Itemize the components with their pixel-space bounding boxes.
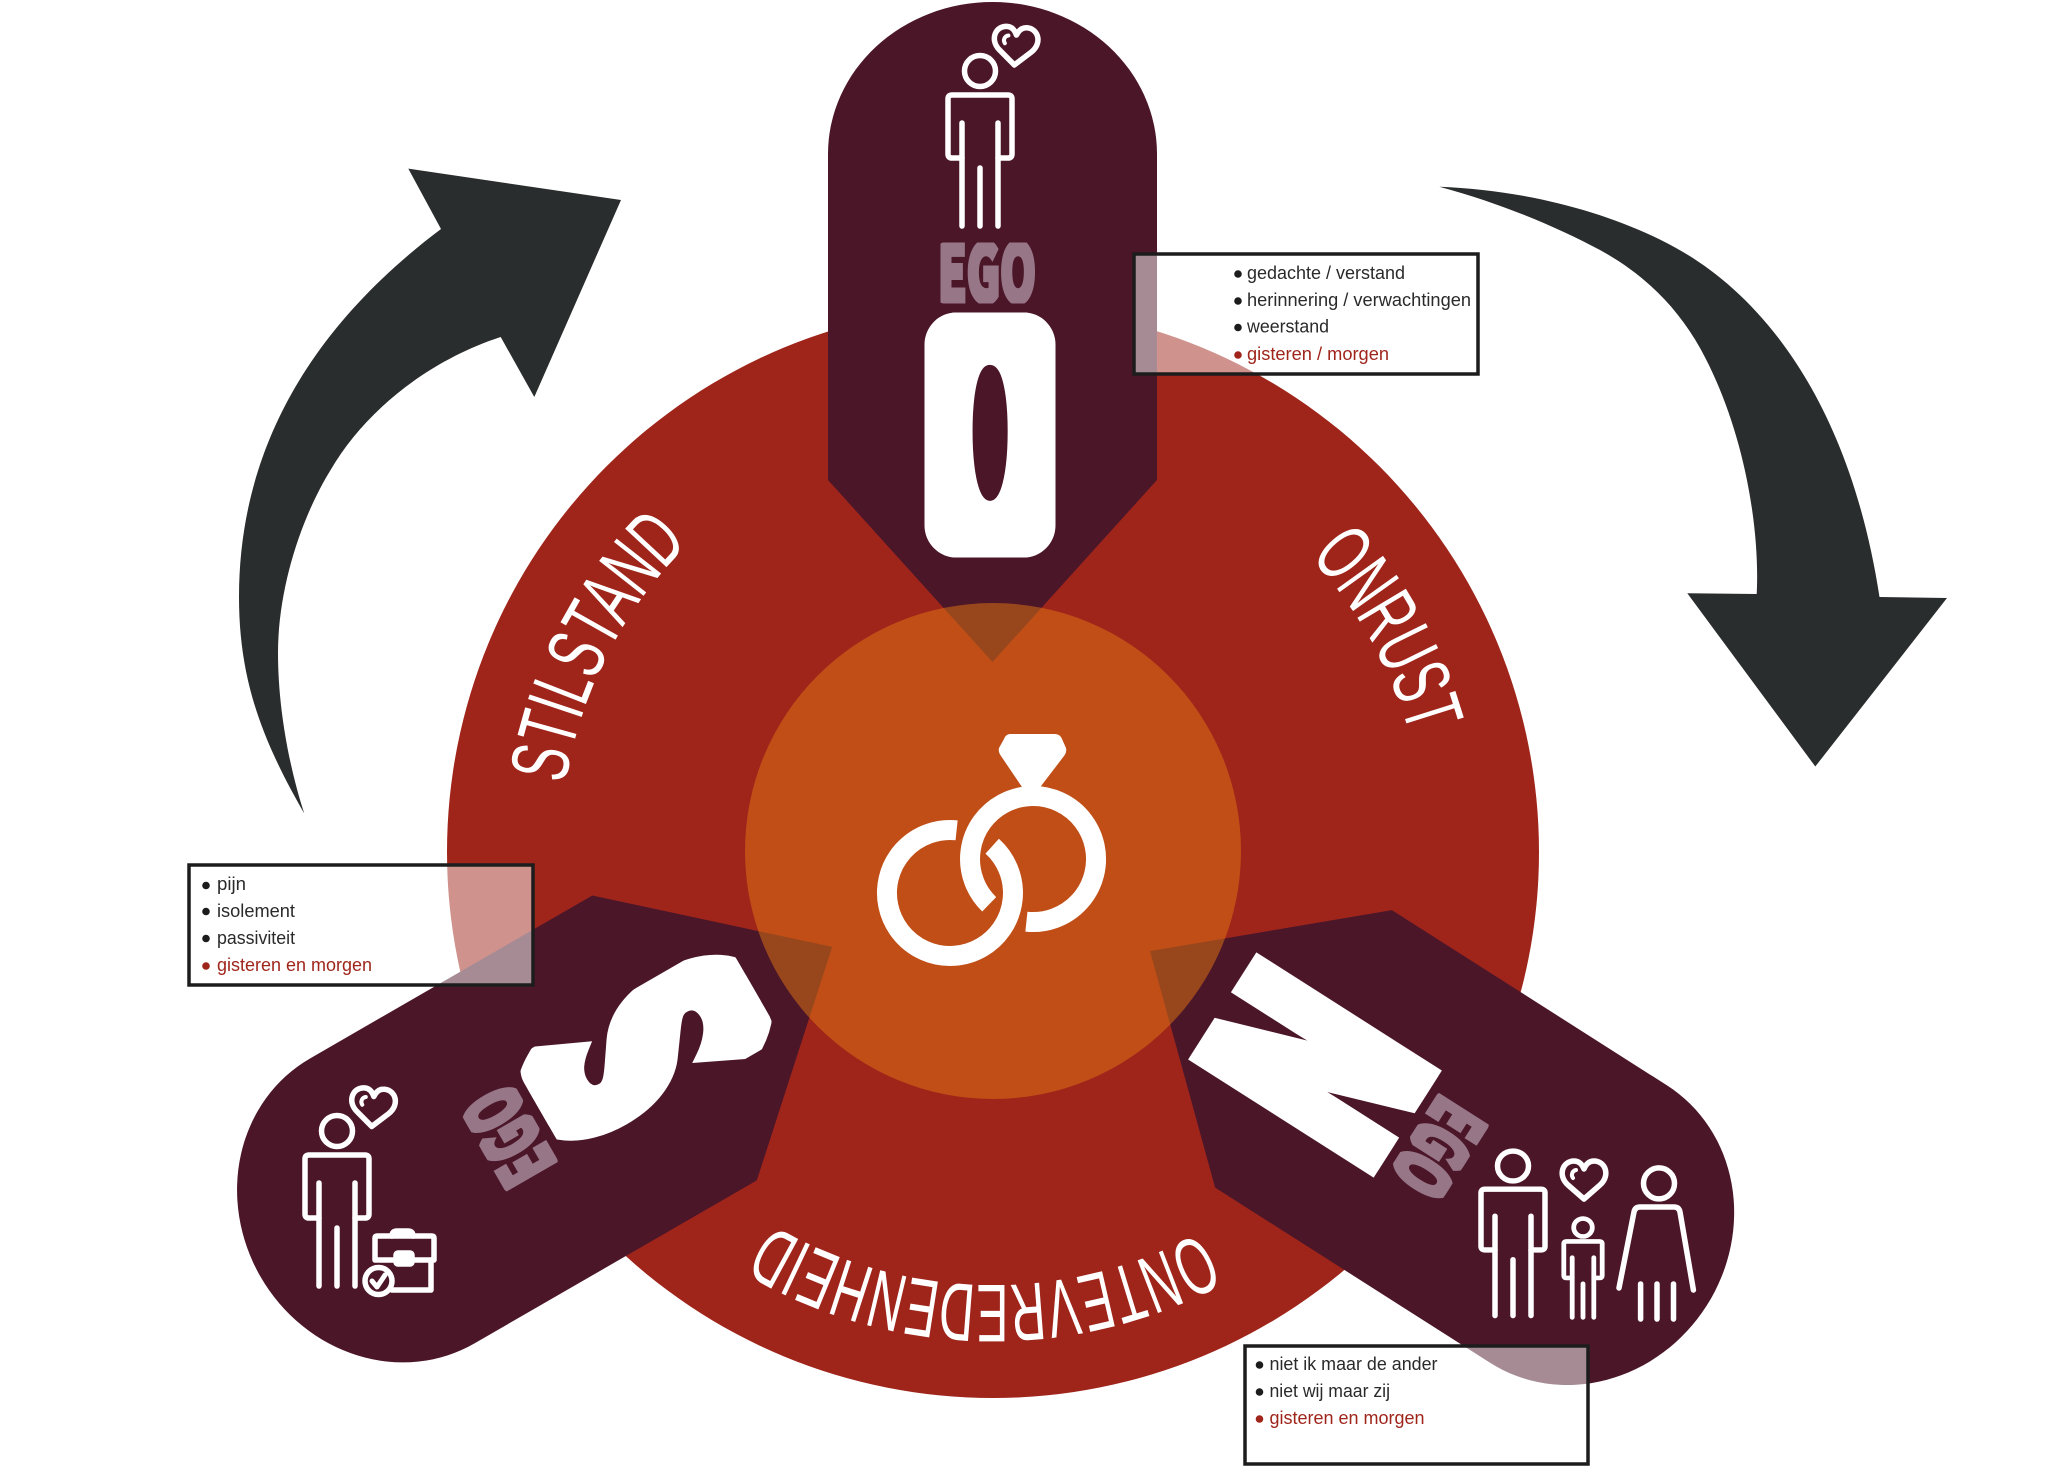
icon: person with heart and briefcase xyxy=(305,1087,434,1294)
panel: top pill O xyxy=(828,2,1157,662)
callout: pijn / isolement: isolement xyxy=(217,901,295,921)
heading: EGO lower-right: EGO xyxy=(1369,1079,1520,1224)
arrow: left curved upward xyxy=(239,169,621,814)
icon: person with heart (top) xyxy=(948,26,1039,226)
label: ONTEVREDENHEID: ONTEVREDENHEID xyxy=(754,1232,1216,1342)
icon: family with heart xyxy=(1481,1151,1693,1319)
callout: niet ik maar de ander: gisteren en morgen xyxy=(1270,1408,1424,1428)
callout: gedachte / verstand xyxy=(1134,254,1478,374)
callout: niet ik maar de ander: niet ik maar de ander xyxy=(1270,1354,1438,1374)
callout: gedachte / verstand: herinnering / verwachtingen xyxy=(1247,290,1471,310)
inner orange circle xyxy=(745,603,1241,1099)
letter O: O xyxy=(908,96,1072,718)
callout: niet ik maar de ander xyxy=(1245,1346,1588,1464)
letter S: S xyxy=(389,888,865,1233)
callout: pijn / isolement: gisteren en morgen xyxy=(217,955,372,975)
icon: interlocking rings with diamond xyxy=(887,734,1096,956)
callout: pijn / isolement xyxy=(189,865,533,985)
panel: lower-right pill N xyxy=(1062,812,1795,1444)
outer red circle xyxy=(447,306,1539,1398)
callout: gedachte / verstand: gisteren / morgen xyxy=(1247,344,1389,364)
callout: pijn / isolement: pijn xyxy=(217,874,246,894)
label: STILSTAND: STILSTAND xyxy=(512,514,679,780)
callout: niet ik maar de ander: niet wij maar zij xyxy=(1270,1381,1390,1401)
arrow: right curved downward xyxy=(1439,187,1947,766)
heading: EGO lower-left: EGO xyxy=(429,1068,579,1211)
callout: gedachte / verstand: weerstand xyxy=(1246,316,1329,336)
heading: EGO top: EGO xyxy=(938,209,1036,325)
label: ONRUST: ONRUST xyxy=(1318,529,1464,724)
letter N: N xyxy=(1116,901,1549,1250)
callout: pijn / isolement: passiviteit xyxy=(217,928,295,948)
callout: gedachte / verstand: gedachte / verstand xyxy=(1247,263,1405,283)
panel: lower-left pill S xyxy=(178,804,914,1419)
